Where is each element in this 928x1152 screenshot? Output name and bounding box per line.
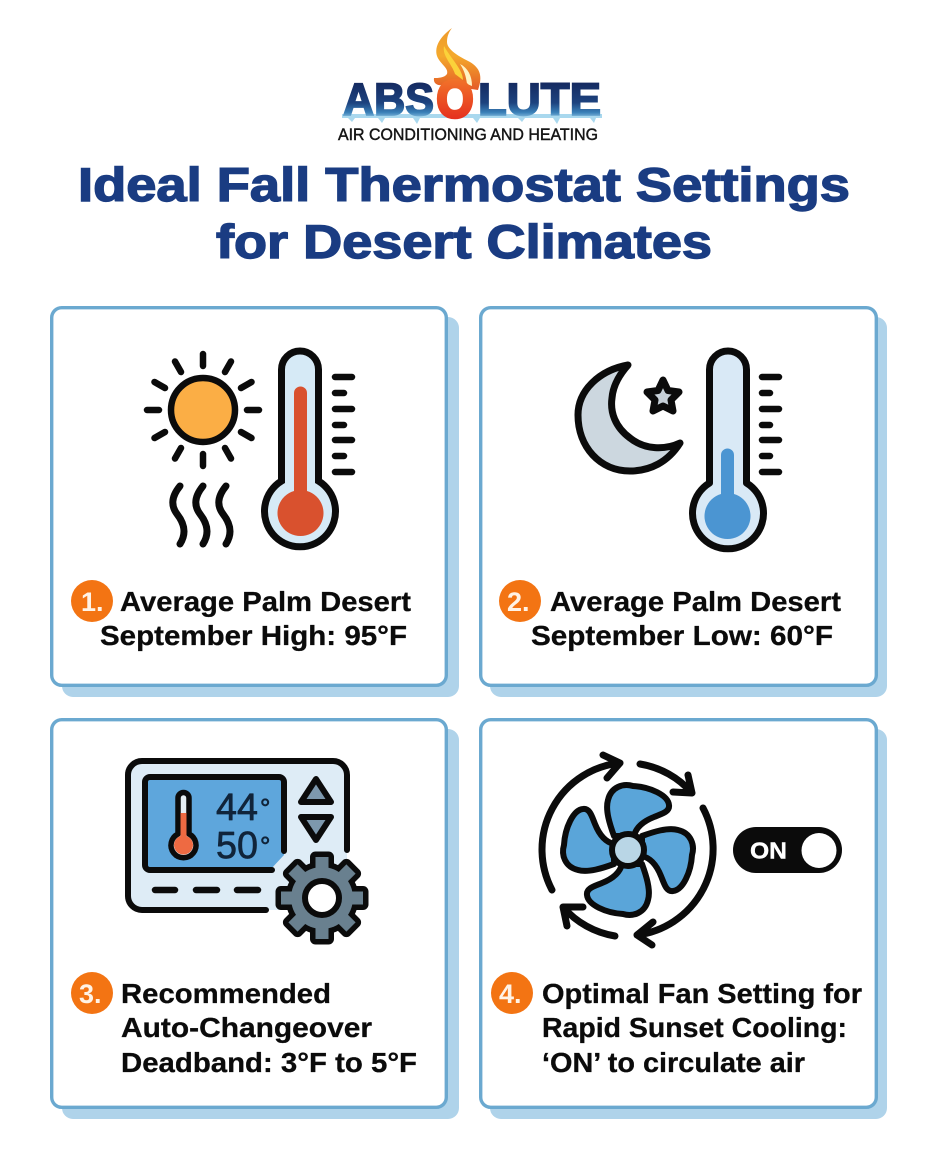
display readings: 50 — [216, 825, 258, 867]
number badge 4: 4. — [499, 979, 522, 1009]
label 4: Optimal Fan Setting for — [542, 978, 862, 1009]
number badge 1 — [71, 580, 113, 622]
toggle: ON — [733, 827, 842, 873]
label 2: Average Palm Desert — [550, 586, 841, 617]
label 3: Auto-Changeover — [121, 1012, 372, 1043]
logo tagline: AIR CONDITIONING AND HEATING — [338, 125, 598, 144]
logo wordmark ring letter: O — [436, 71, 474, 129]
sun — [147, 354, 259, 466]
display readings: ° — [260, 831, 270, 861]
card shadow — [490, 729, 887, 1119]
number badge 1: 1. — [81, 587, 104, 617]
moon — [578, 365, 680, 471]
label 3: Deadband: 3°F to 5°F — [121, 1047, 417, 1078]
scale ticks — [762, 377, 779, 472]
display thermometer — [171, 792, 196, 858]
label 3: Recommended — [121, 978, 331, 1009]
panel: optimal fan setting — [481, 720, 887, 1119]
thermostat body — [128, 761, 347, 910]
panel: average September high — [52, 308, 459, 697]
thermometer — [264, 351, 336, 547]
scale ticks — [335, 377, 352, 472]
logo wordmark right: LUTE — [478, 74, 601, 125]
number badge 2 — [499, 580, 541, 622]
title: for Desert Climates — [216, 215, 712, 268]
label 2: September Low: 60°F — [531, 620, 833, 651]
label 3 — [121, 978, 417, 1078]
label 1 — [100, 586, 411, 651]
card shadow — [62, 729, 459, 1119]
label 4: ‘ON’ to circulate air — [542, 1047, 805, 1078]
number badge 2: 2. — [507, 587, 530, 617]
toggle: ON: ON — [750, 838, 787, 864]
number badge 3 — [71, 972, 113, 1014]
number badge 4 — [491, 972, 533, 1014]
number badge 3: 3. — [79, 979, 102, 1009]
gear — [281, 857, 363, 939]
panel: average September low — [481, 308, 887, 697]
label 1: Average Palm Desert — [120, 586, 411, 617]
icon: sun with heat waves and hot thermometer — [147, 351, 352, 547]
logo icicle band — [342, 114, 602, 124]
fan hub — [612, 834, 644, 866]
label 2 — [531, 586, 841, 651]
heat waves — [173, 486, 230, 544]
thermometer — [692, 351, 764, 549]
logo wordmark left: ABS — [343, 74, 434, 125]
display readings: 44 — [216, 787, 258, 829]
display screen — [145, 777, 284, 870]
display readings — [216, 787, 270, 867]
label 4: Rapid Sunset Cooling: — [542, 1012, 847, 1043]
label 1: September High: 95°F — [100, 620, 407, 651]
icon: thermostat with gear — [128, 761, 363, 939]
up and down buttons — [301, 779, 331, 802]
display readings: ° — [260, 793, 270, 823]
star — [647, 380, 679, 411]
title — [78, 158, 850, 268]
panel: auto-changeover deadband — [52, 720, 459, 1119]
logo flame — [434, 28, 480, 90]
card frame — [52, 720, 446, 1107]
title: Ideal Fall Thermostat Settings — [78, 158, 850, 211]
fan blades — [563, 785, 693, 915]
label 4 — [542, 978, 862, 1078]
icon: fan with circulation arrows — [542, 755, 713, 945]
card shadow — [490, 317, 887, 697]
card frame — [481, 308, 876, 685]
card shadow — [62, 317, 459, 697]
icon: moon, star and cold thermometer — [578, 351, 779, 549]
circulation arrows — [542, 755, 713, 945]
logo: Absolute Air Conditioning and Heating — [338, 28, 602, 144]
dashes — [155, 887, 258, 893]
card frame — [52, 308, 446, 685]
card frame — [481, 720, 876, 1107]
